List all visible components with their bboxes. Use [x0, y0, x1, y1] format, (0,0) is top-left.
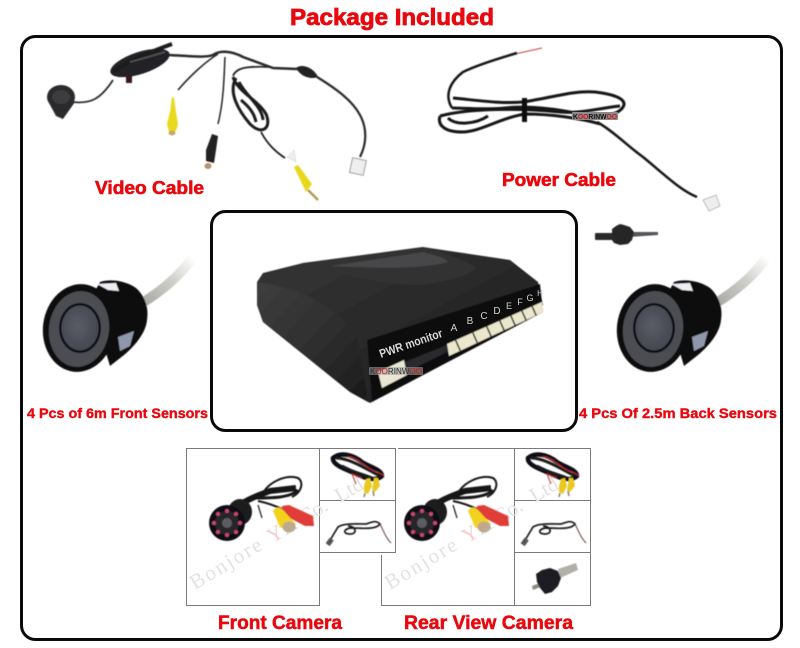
label: PWR monitor: PWR monitor — [377, 326, 445, 361]
watermark: rear camera — [380, 471, 563, 594]
watermark: rear camera: Co. — [489, 493, 527, 529]
icon: power cable — [439, 48, 720, 211]
label: back sensors: 4 Pcs Of 2.5m Back Sensors — [579, 405, 777, 421]
labels: sensor ports A to H: D — [493, 306, 501, 317]
icon: back sensor — [611, 258, 766, 377]
labels: sensor ports A to H: B — [467, 316, 474, 327]
watermark: front camera: Bonjore — [185, 533, 266, 594]
watermark: control unit brand: KOORINWOO — [370, 367, 422, 376]
watermark: rear camera: A — [471, 511, 497, 540]
labels: sensor ports A to H: H — [537, 289, 543, 298]
label: power cable: Power Cable — [502, 170, 616, 190]
labels: sensor ports A to H: F — [517, 297, 523, 307]
icon: rear camera and cables — [404, 455, 586, 546]
watermark: rear camera: Ltd — [525, 471, 563, 507]
panel: control unit — [212, 212, 576, 430]
icon: video cable — [47, 43, 366, 200]
label: video cable: Video Cable — [95, 178, 204, 198]
panel: rear camera set — [380, 448, 590, 606]
watermark: rear camera: Y — [457, 520, 483, 548]
watermark: front camera: Co. — [294, 493, 332, 529]
labels: sensor ports A to H: E — [506, 301, 512, 311]
label: front camera: Front Camera — [218, 613, 342, 634]
labels: sensor ports A to H: G — [526, 293, 534, 303]
title: Package Included — [290, 4, 494, 30]
panel: front camera set — [185, 448, 396, 606]
label: rear view camera: Rear View Camera — [404, 613, 573, 634]
labels: sensor ports A to H — [451, 289, 543, 334]
icon: hole saw — [532, 563, 578, 594]
watermark: rear camera: Bonjore — [380, 533, 461, 594]
watermark: front camera: Ltd — [330, 471, 368, 507]
labels: sensor ports A to H: A — [451, 323, 458, 334]
watermark: front camera: A — [276, 511, 302, 540]
icon: hole saw drill — [595, 224, 658, 245]
watermark: front camera — [185, 471, 368, 594]
label: front sensors: 4 Pcs of 6m Front Sensors — [27, 405, 208, 421]
watermark: power cable brand: KOORINWOO — [573, 114, 618, 121]
icon: front camera and cables — [209, 455, 391, 546]
icon: parking sensor control unit — [257, 247, 543, 403]
icon: front sensor — [37, 258, 192, 377]
labels: sensor ports A to H: C — [480, 311, 488, 322]
watermark: front camera: Y — [262, 520, 288, 548]
